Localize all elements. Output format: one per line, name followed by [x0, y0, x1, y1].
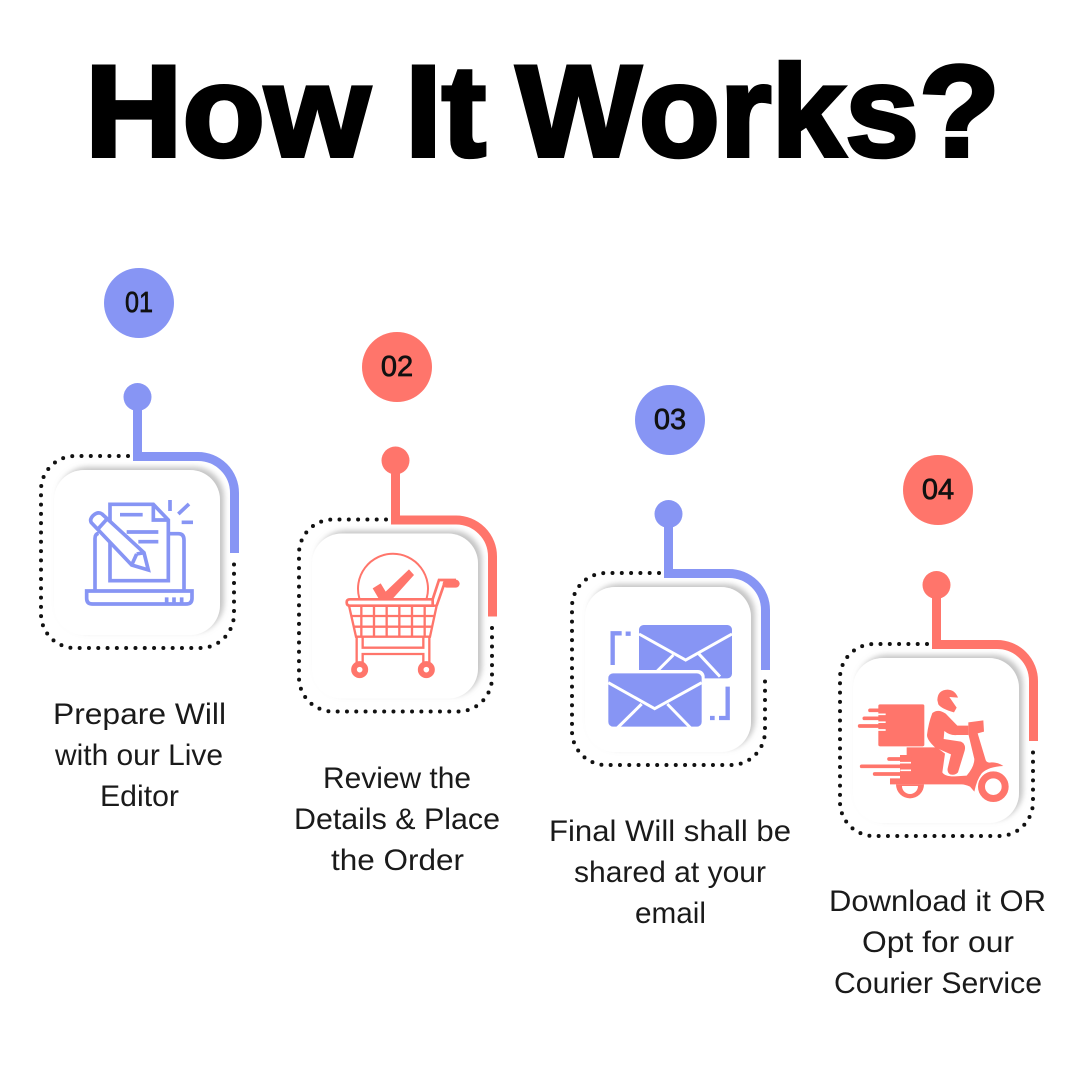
number badge 02: [362, 332, 432, 402]
title: [85, 38, 1000, 184]
icon: laptop, document and pencil: [87, 500, 193, 604]
label 1: Editor: [100, 780, 179, 813]
label 3: email: [635, 897, 706, 930]
number badge 01: 01: [125, 287, 153, 319]
label 1: with our Live: [54, 739, 223, 772]
label 2: the Order: [331, 844, 464, 877]
delivery box with speed lines: [860, 704, 924, 746]
number badge 01: [104, 268, 174, 338]
back envelope: [639, 625, 732, 678]
connector with pin 4: [922, 571, 1034, 741]
front wheel: [977, 770, 1010, 803]
label 3: [549, 815, 791, 930]
label 4: Opt for our: [862, 926, 1014, 959]
connector with pin 1: [124, 383, 234, 553]
card 4: [853, 658, 1019, 823]
title: It: [405, 38, 486, 184]
number badge 03: [635, 385, 705, 455]
scooter body: [890, 720, 1003, 792]
label 1: Prepare Will: [53, 698, 226, 731]
label 2: [294, 762, 500, 877]
title: How: [85, 38, 371, 184]
rider: [927, 690, 968, 775]
number badge 04: [903, 455, 973, 525]
icon: two envelopes: [605, 625, 732, 730]
dotted frame 4: [840, 644, 1033, 836]
step 3: [549, 385, 791, 930]
label 3: Final Will shall be: [549, 815, 791, 848]
icon: delivery scooter rider: [860, 690, 1010, 803]
label 4: Courier Service: [834, 967, 1042, 1000]
step 1: [41, 268, 234, 813]
label 4: [829, 885, 1046, 1000]
connector with pin 3: [654, 500, 766, 670]
number badge 03: 03: [654, 404, 686, 436]
label 4: Download it OR: [829, 885, 1046, 918]
number badge 04: 04: [922, 474, 954, 506]
card 2: [312, 534, 478, 698]
label 2: Review the: [323, 762, 471, 795]
label 2: Details & Place: [294, 803, 500, 836]
step 2: [294, 332, 500, 877]
step 4: [829, 455, 1046, 1000]
dotted frame 2: [299, 520, 492, 712]
number badge 02: 02: [381, 351, 413, 383]
speed lines: [862, 759, 911, 774]
label 3: shared at your: [574, 856, 766, 889]
front envelope: [605, 670, 705, 730]
card 1: [54, 470, 220, 635]
title: Works?: [516, 38, 1000, 184]
connector with pin 2: [382, 446, 492, 616]
dotted frame 1: [41, 456, 234, 648]
dotted frame 3: [572, 573, 765, 765]
card 3: [585, 587, 751, 752]
rear wheel: [896, 784, 924, 798]
icon: shopping cart with check mark: [347, 554, 456, 675]
label 1: [53, 698, 226, 813]
